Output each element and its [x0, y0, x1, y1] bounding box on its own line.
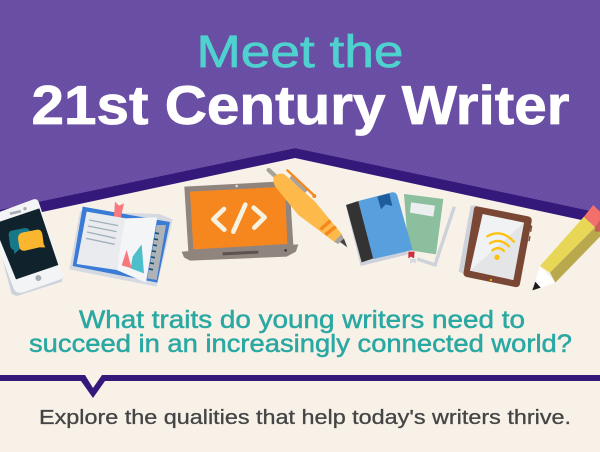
title: 21st Century Writer: 21st Century Writer [32, 74, 570, 136]
title: Meet the: Meet the [196, 26, 404, 77]
icon: wifi symbol [487, 233, 514, 259]
icon: pen [269, 170, 347, 247]
icon: tablet with wifi [459, 206, 532, 287]
question text [29, 306, 572, 358]
question text: What traits do young writers need to [79, 306, 525, 334]
purple roof banner [0, 0, 600, 224]
icon: pencil [532, 205, 600, 290]
divider with pointer [0, 375, 600, 398]
icon: chat bubbles [9, 228, 45, 254]
icon: open notebook [69, 202, 173, 287]
question text: succeed in an increasingly connected world? [29, 330, 572, 358]
icon: laptop [182, 181, 298, 261]
icon: smartphone [0, 199, 63, 296]
subheading: Explore the qualities that help today's writers thrive. [39, 407, 571, 429]
icon: closed books [346, 192, 454, 266]
icon: code symbol [213, 205, 265, 232]
